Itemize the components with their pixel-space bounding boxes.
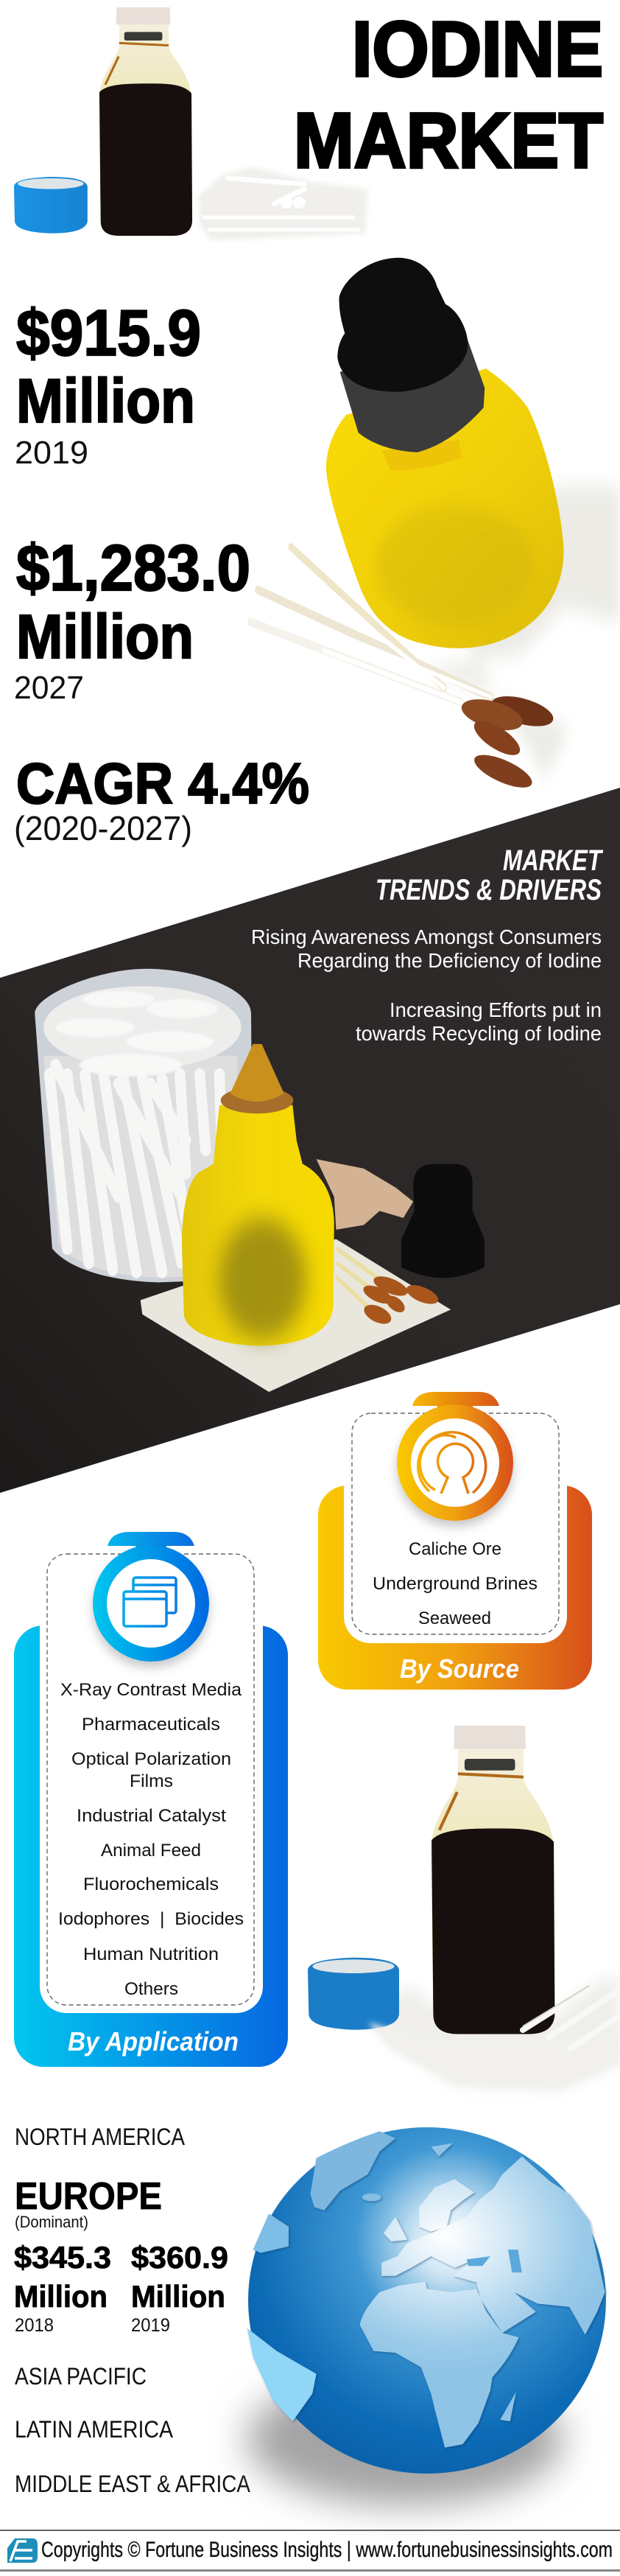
soft shadow xyxy=(422,486,620,779)
British Isles xyxy=(384,2217,407,2241)
panel: by source xyxy=(318,1392,592,1690)
logo xyxy=(7,2538,38,2563)
source list: Underground Brines xyxy=(373,1574,538,1594)
2027 value: $1,283.0 xyxy=(16,531,250,604)
Iceland xyxy=(362,2194,381,2201)
2019 value: 2019 xyxy=(15,435,88,471)
application list: Others xyxy=(124,1979,178,1999)
North America edge xyxy=(253,2213,289,2253)
card base xyxy=(318,1485,592,1690)
label: By Source xyxy=(400,1653,519,1684)
Middle East and Africa: MIDDLE EAST & AFRICA xyxy=(15,2471,251,2497)
Europe 2018: $345.3 xyxy=(14,2240,111,2275)
photo: iodine bottle lower xyxy=(308,1726,620,2089)
2019 value: $915.9 xyxy=(16,296,201,369)
yellow body xyxy=(326,368,563,648)
plastic jar of cotton swabs xyxy=(35,969,253,1282)
Europe 2019: 2019 xyxy=(131,2315,170,2336)
Europe 2019: $360.9 xyxy=(131,2240,228,2275)
icon: ore xyxy=(397,1404,513,1521)
source list: Seaweed xyxy=(418,1609,491,1628)
panel: by application xyxy=(14,1532,288,2067)
CAGR: (2020-2027) xyxy=(14,809,192,847)
North America: NORTH AMERICA xyxy=(15,2124,186,2150)
application list: Animal Feed xyxy=(101,1841,201,1861)
South America xyxy=(247,2328,317,2421)
gauze xyxy=(364,1975,620,2089)
application list: Industrial Catalyst xyxy=(77,1806,226,1826)
swabs xyxy=(250,547,491,751)
Europe 2019: Million xyxy=(131,2279,225,2314)
application list: Films xyxy=(130,1771,173,1791)
Latin America: LATIN AMERICA xyxy=(15,2416,174,2443)
source list: Caliche Ore xyxy=(409,1539,501,1559)
application list: Pharmaceuticals xyxy=(82,1715,220,1735)
driver 1: Regarding the Deficiency of Iodine xyxy=(297,949,602,972)
blue cap xyxy=(308,1958,399,2030)
2027 value: Million xyxy=(16,602,194,671)
yellow bottle xyxy=(182,1044,334,1345)
heading xyxy=(376,844,604,906)
black cap xyxy=(401,1164,485,1278)
tab xyxy=(412,1392,499,1418)
Europe 2018 xyxy=(14,2240,111,2336)
2019 value: Million xyxy=(16,366,195,435)
icon: windows xyxy=(93,1545,209,1662)
top photo: iodine bottle with cap and gauze xyxy=(14,7,367,241)
CAGR: CAGR 4.4% xyxy=(16,751,309,816)
Madagascar xyxy=(500,2392,516,2421)
Africa xyxy=(360,2282,519,2448)
application list xyxy=(58,1680,244,1999)
collar ledge xyxy=(381,440,462,470)
driver 1 xyxy=(251,925,602,972)
driver 2: Increasing Efforts put in xyxy=(390,998,602,1021)
Europe 2018: 2018 xyxy=(15,2315,54,2336)
application list: X-Ray Contrast Media xyxy=(60,1680,242,1700)
swabs on gauze xyxy=(334,1247,380,1307)
Greenland xyxy=(311,2131,395,2211)
CAGR xyxy=(14,751,309,847)
white card xyxy=(344,1407,567,1643)
source list xyxy=(373,1539,538,1628)
application list: Fluorochemicals xyxy=(83,1875,219,1894)
2019 value xyxy=(15,296,201,471)
application list: Iodophores | Biocides xyxy=(58,1909,244,1929)
tab xyxy=(108,1532,194,1558)
globe shadow xyxy=(247,2373,563,2505)
swab tips xyxy=(363,1276,439,1324)
globe xyxy=(247,2127,606,2505)
bottle xyxy=(99,7,192,236)
title: IODINE xyxy=(352,6,603,93)
driver 2 xyxy=(356,998,602,1045)
title: MARKET xyxy=(294,97,603,184)
application list: Human Nutrition xyxy=(83,1945,219,1964)
bottle xyxy=(431,1726,554,2034)
Europe: EUROPE xyxy=(15,2175,162,2218)
Caspian and Black Sea xyxy=(467,2250,522,2272)
Svalbard xyxy=(431,2143,453,2157)
gauze xyxy=(141,1239,451,1392)
blue bottle cap xyxy=(14,177,88,234)
Scandinavia xyxy=(419,2180,474,2232)
swab tips xyxy=(460,690,554,794)
gauze front and swabs xyxy=(368,1986,620,2089)
footer xyxy=(0,2530,620,2572)
title xyxy=(294,6,603,184)
photo: jar, bottle, gauze xyxy=(35,969,485,1392)
Europe: (Dominant) xyxy=(15,2213,88,2231)
Europe 2019 xyxy=(131,2240,228,2336)
white card xyxy=(40,1547,263,2013)
bandages xyxy=(317,1159,413,1230)
2027 value: 2027 xyxy=(14,670,84,706)
application list: Optical Polarization xyxy=(71,1749,231,1769)
2027 value xyxy=(14,531,250,706)
continents xyxy=(247,2131,605,2448)
gauze and cotton swabs xyxy=(198,167,367,241)
Europe 2018: Million xyxy=(14,2279,108,2314)
photo: yellow bottle with swabs xyxy=(250,258,620,794)
card base xyxy=(14,1625,288,2067)
Asia Pacific: ASIA PACIFIC xyxy=(15,2363,147,2390)
regional breakdown xyxy=(14,2124,251,2497)
ribbed collar xyxy=(340,336,485,452)
Eurasia xyxy=(381,2157,605,2335)
panel: market trends and drivers (dark band) xyxy=(0,788,620,1493)
black cap xyxy=(337,258,468,392)
market size figures xyxy=(14,296,309,847)
driver 1: Rising Awareness Amongst Consumers xyxy=(251,925,602,948)
driver 2: towards Recycling of Iodine xyxy=(356,1022,602,1045)
label: By Application xyxy=(68,2026,239,2057)
